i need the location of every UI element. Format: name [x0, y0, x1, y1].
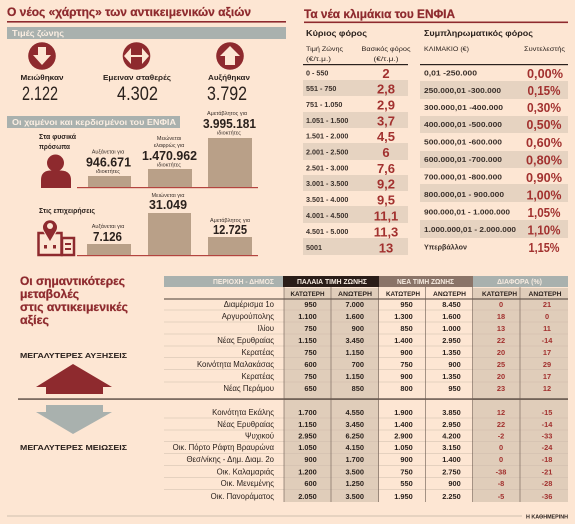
heading bar: losers and winners of ENFIA: [7, 116, 180, 128]
bar chart: individuals: 946.671: [86, 154, 131, 170]
table: main tax: 11,1: [374, 208, 398, 224]
rows: biggest decreases: 1.150: [298, 420, 317, 429]
rows: biggest increases: Νέας Ερυθραίας: [217, 336, 274, 345]
table: main tax: 2.501 - 3.000: [306, 164, 348, 172]
stat: decreased: [20, 73, 64, 105]
rows: biggest increases: -14: [542, 336, 553, 345]
heading bar: zone prices: Τιμές ζώνης: [12, 29, 64, 38]
rows: biggest increases: 21: [543, 300, 551, 309]
table: supplementary tax: 0,30%: [527, 100, 561, 115]
heading: most significant changes: [20, 274, 128, 327]
table: main tax: 13: [379, 240, 393, 256]
table: main tax: 751 - 1.050: [306, 100, 342, 109]
rows: biggest increases: 950: [400, 300, 413, 309]
bar chart: individuals: [77, 110, 258, 188]
rows: biggest decreases: 2.950: [298, 432, 317, 440]
table: supplementary tax: 1,10%: [528, 222, 561, 238]
rows: biggest decreases: -2: [498, 432, 504, 440]
rows: biggest decreases: 3.850: [442, 408, 461, 417]
table: price changes: ΚΑΤΩΤΕΡΗ: [290, 291, 325, 298]
rows: biggest increases: 17: [543, 348, 551, 357]
rows: biggest decreases: 0: [499, 443, 503, 452]
rows: biggest decreases: Κοινότητα Εκάλης: [212, 408, 274, 417]
rows: biggest increases: Διαμέρισμα 1ο: [224, 300, 275, 309]
table: supplementary tax: 500.000,01 -600.000: [424, 138, 502, 146]
heading bar: losers and winners of ENFIA: Οι χαμένοι και κερδισμένοι του ΕΝΦΙΑ: [12, 118, 176, 127]
rows: biggest increases: 1.400: [394, 336, 413, 345]
rows: biggest increases: 11: [543, 324, 551, 333]
table: supplementary tax: 0,01 -250.000: [424, 68, 477, 78]
table: price changes: ΔΙΑΦΟΡΑ (%): [497, 279, 542, 286]
rows: biggest increases: Κερατέας: [242, 372, 274, 381]
rows: biggest decreases: -8: [498, 479, 504, 488]
rows: biggest increases: 1.350: [442, 372, 461, 381]
bar chart: businesses: Αμετάβλητος για: [210, 217, 251, 224]
rows: biggest increases: Κοινότητα Μαλακάσας: [197, 360, 274, 369]
rows: biggest decreases: Οικ. Καλαμαριάς: [217, 468, 274, 476]
heading: most significant changes: Οι σημαντικότερες: [20, 274, 125, 288]
rows: biggest increases: 750: [304, 324, 317, 333]
rows: biggest decreases: 900: [304, 455, 317, 464]
table: main tax: 0 - 550: [306, 68, 328, 78]
icon: stayed stable: [123, 42, 150, 70]
table: supplementary tax: 1,05%: [528, 205, 561, 220]
table: main tax: Κύριος φόρος: [306, 28, 368, 38]
icon: person: [41, 154, 71, 188]
rows: biggest decreases: 4.550: [346, 408, 364, 417]
rows: biggest increases: 20: [497, 372, 505, 381]
rows: biggest decreases: 22: [497, 420, 505, 429]
panel: new ENFIA brackets: [303, 7, 568, 256]
bar chart: individuals: ιδιοκτήτες: [157, 162, 181, 168]
table: main tax: 4.501 - 5.000: [306, 227, 348, 236]
stat: increased: Αυξήθηκαν: [208, 73, 250, 82]
rows: biggest increases: 7.000: [346, 300, 364, 309]
rows: biggest decreases: -38: [496, 468, 506, 476]
table: main tax: 3,7: [377, 114, 395, 128]
table: main tax: 551 - 750: [306, 84, 336, 93]
rows: biggest decreases: 1.700: [298, 408, 317, 417]
table: main tax: 4,5: [377, 129, 395, 144]
bar chart: businesses: 31.049: [149, 197, 187, 212]
rows: biggest increases: 900: [448, 360, 461, 369]
table: supplementary tax: 1,15%: [528, 240, 560, 255]
stat: stayed stable: 4.302: [117, 84, 158, 105]
table: price changes: ΚΑΤΩΤΕΡΗ: [482, 291, 517, 298]
rows: biggest increases: 600: [304, 360, 317, 369]
title: new ENFIA brackets: Τα νέα κλιμάκια του ΕΝΦΙΑ: [304, 7, 455, 21]
rows: biggest increases: 1.100: [298, 312, 317, 321]
text: individuals: [39, 132, 76, 151]
table: main tax: 5001: [306, 243, 322, 252]
icon: buildings with map pin: [38, 220, 74, 255]
table: main tax: 3.501 - 4.000: [306, 195, 348, 204]
table: main tax: 2.001 - 2.500: [306, 148, 348, 156]
rows: biggest decreases: 12: [497, 408, 505, 417]
table: main tax: 2,9: [377, 98, 395, 112]
rows: biggest decreases: 1.250: [346, 479, 364, 488]
heading: most significant changes: μεταβολές: [20, 287, 79, 301]
stat: decreased: 2.122: [22, 84, 58, 105]
rows: biggest increases: 1.350: [442, 348, 461, 357]
table: price changes: ΝΕΑ ΤΙΜΗ ΖΩΝΗΣ: [397, 279, 454, 286]
table: main tax: Τιμή Ζώνης: [306, 45, 343, 53]
label: biggest decreases: ΜΕΓΑΛΥΤΕΡΕΣ ΜΕΙΩΣΕΙΣ: [20, 443, 128, 452]
rows: biggest increases: 29: [543, 360, 551, 369]
rows: biggest decreases: -5: [498, 492, 504, 501]
rows: biggest decreases: Οικ. Πόρτο Ράφτη Βραυρώνα: [173, 443, 274, 452]
rows: biggest increases: 950: [448, 384, 461, 393]
bar chart: individuals: ελαφρώς για: [154, 142, 185, 149]
rows: biggest increases: 22: [497, 336, 505, 345]
rows: biggest increases: 1.600: [442, 312, 461, 321]
rows: biggest decreases: Ψυχικού: [245, 432, 274, 440]
rows: biggest increases: [197, 300, 553, 393]
rows: biggest increases: Νέας Περάμου: [223, 384, 274, 393]
rows: biggest increases: 900: [400, 372, 413, 381]
table: supplementary tax: Συντελεστής: [524, 46, 565, 53]
rows: biggest decreases: 0: [499, 455, 503, 464]
rows: biggest increases: 1.150: [346, 372, 364, 381]
rows: biggest decreases: -14: [542, 420, 553, 429]
text: individuals: Στα φυσικά: [39, 132, 76, 141]
rows: biggest decreases: 900: [448, 479, 461, 488]
rows: biggest decreases: 1.200: [298, 468, 317, 476]
rows: biggest decreases: 2.900: [394, 432, 413, 440]
icon: decreased: [28, 42, 56, 70]
table: price changes: ΠΕΡΙΟΧΗ - ΔΗΜΟΣ: [213, 279, 274, 286]
rows: biggest decreases: -28: [542, 479, 552, 488]
bar chart: businesses: 7.126: [93, 229, 122, 244]
rows: biggest increases: 850: [400, 324, 413, 333]
rows: biggest increases: Κερατέας: [242, 348, 274, 357]
table: main tax: 2: [382, 66, 390, 81]
rows: biggest decreases: -33: [542, 432, 552, 440]
table: supplementary tax: 1.000.000,01 - 2.000.000: [424, 225, 516, 234]
table: price changes: ΑΝΩΤΕΡΗ: [338, 291, 372, 298]
label: biggest increases: ΜΕΓΑΛΥΤΕΡΕΣ ΑΥΞΗΣΕΙΣ: [20, 351, 128, 360]
rows: biggest increases: 650: [304, 384, 317, 393]
table: main tax: (€/τ.μ.): [306, 56, 331, 63]
bar chart: businesses: 12.725: [213, 222, 247, 237]
rows: biggest increases: 750: [400, 360, 413, 369]
rows: biggest decreases: -18: [542, 455, 552, 464]
rows: biggest increases: 17: [543, 372, 551, 381]
rows: biggest increases: 8.450: [442, 300, 461, 309]
rows: biggest decreases: 1.900: [394, 408, 413, 417]
table: supplementary tax: 0,50%: [526, 117, 562, 132]
rows: biggest decreases: 1.400: [394, 420, 413, 429]
rows: biggest decreases: 4.150: [346, 443, 364, 452]
table: supplementary tax: 0,90%: [526, 170, 562, 185]
title: new map of property values: Ο νέος «χάρτης» των αντικειμενικών αξιών: [7, 5, 251, 19]
rows: biggest increases: 1.300: [394, 312, 413, 321]
rows: biggest decreases: 1.400: [442, 455, 461, 464]
text: businesses: Στις επιχειρήσεις: [39, 206, 95, 215]
arrow: up: [36, 364, 112, 394]
table: main tax: 2,8: [377, 82, 395, 96]
rows: biggest decreases: 1.050: [394, 443, 413, 452]
rows: biggest decreases: 3.500: [346, 492, 364, 501]
rows: biggest increases: 0: [545, 312, 549, 321]
rows: biggest increases: 800: [400, 384, 413, 393]
table: supplementary tax: Συμπληρωματικός φόρος: [424, 28, 534, 38]
table: main tax: 7,6: [377, 161, 395, 176]
rows: biggest decreases: 2.750: [442, 468, 461, 476]
rows: biggest increases: 700: [352, 360, 364, 369]
rows: biggest decreases: Οικ. Μενεμένης: [221, 479, 274, 488]
text: individuals: πρόσωπα: [39, 142, 70, 151]
rows: biggest increases: 13: [497, 324, 505, 333]
rows: biggest increases: Ιλίου: [258, 324, 274, 333]
rows: biggest decreases: -36: [542, 492, 552, 501]
rows: biggest decreases: 6.250: [346, 432, 364, 440]
rows: biggest increases: 900: [352, 324, 364, 333]
table: supplementary tax: 700.000,01 -800.000: [424, 172, 502, 182]
panel: most significant changes: [18, 274, 568, 502]
rows: biggest decreases: 2.950: [442, 420, 461, 429]
stat: increased: 3.792: [207, 84, 247, 105]
table: main tax: 1.051 - 1.500: [306, 116, 348, 125]
table: main tax: 3.001 - 3.500: [306, 179, 348, 188]
rows: biggest decreases: 2.050: [298, 492, 317, 501]
rows: biggest increases: 850: [352, 384, 364, 393]
bar chart: businesses: [77, 192, 258, 256]
bar chart: individuals: ιδιοκτήτες: [217, 130, 241, 136]
rows: biggest decreases: 1.700: [346, 455, 364, 464]
rows: biggest decreases: -21: [542, 468, 552, 476]
rows: biggest increases: Αργυρούπολης: [222, 312, 274, 321]
rows: biggest increases: 23: [497, 384, 505, 393]
table: price changes: ΚΑΤΩΤΕΡΗ: [386, 291, 420, 298]
rows: biggest decreases: -24: [542, 443, 553, 452]
heading: most significant changes: στις αντικειμενικές: [20, 300, 128, 314]
rows: biggest decreases: Θεσ/νίκης - Δημ. Διαμ. 2ο: [186, 455, 275, 464]
rows: biggest increases: 20: [497, 348, 505, 357]
table: supplementary tax: 0,15%: [528, 83, 561, 98]
table: main tax: 9,5: [377, 192, 395, 208]
rows: biggest increases: 1.150: [298, 336, 317, 345]
rows: biggest increases: 0: [499, 300, 503, 309]
table: main tax: 9,2: [377, 176, 395, 192]
heading: most significant changes: αξίες: [20, 313, 49, 327]
rows: biggest decreases: Νέας Ερυθραίας: [217, 420, 274, 429]
rows: biggest increases: 750: [304, 372, 317, 381]
rows: biggest increases: 2.950: [442, 336, 461, 345]
table: supplementary tax: Υπερβάλλον: [424, 242, 467, 252]
credit: Kathimerini: Η ΚΑΘΗΜΕΡΙΝΗ: [526, 514, 568, 520]
table: supplementary tax: 900.000,01 - 1.000.000: [424, 208, 510, 216]
rows: biggest decreases: 550: [400, 479, 413, 488]
table: supplementary tax: 0,60%: [526, 135, 562, 150]
table: supplementary tax: 250.000,01 -300.000: [424, 86, 501, 95]
table: supplementary tax: 0,00%: [527, 66, 563, 81]
table: supplementary tax: 400.000,01 -500.000: [424, 120, 502, 129]
rows: biggest decreases: 600: [304, 479, 317, 488]
table: supplementary tax: [420, 28, 568, 255]
table: supplementary tax: 0,80%: [526, 152, 562, 168]
table: main tax: (€/τ.μ.): [374, 56, 398, 63]
table: supplementary tax: 800.000,01 - 900.000: [424, 190, 504, 199]
stat: decreased: Μειώθηκαν: [20, 73, 64, 82]
table: price changes: ΑΝΩΤΕΡΗ: [433, 291, 466, 298]
rows: biggest decreases: -15: [542, 408, 552, 417]
rows: biggest decreases: 900: [400, 455, 413, 464]
rows: biggest increases: 12: [543, 384, 551, 393]
icon: increased: [216, 42, 244, 70]
table: supplementary tax: 600.000,01 -700.000: [424, 155, 502, 164]
stat: increased: [207, 73, 250, 105]
rows: biggest increases: 950: [304, 300, 317, 309]
heading bar: zone prices: [7, 27, 286, 39]
rows: biggest increases: 3.450: [346, 336, 364, 345]
table: supplementary tax: ΚΛΙΜΑΚΙΟ (€): [424, 46, 469, 53]
rows: biggest decreases: 1.950: [394, 492, 413, 501]
rows: biggest increases: 25: [497, 360, 505, 369]
stat: stayed stable: Εμειναν σταθερές: [103, 73, 171, 82]
arrow: down: [36, 405, 112, 434]
bar chart: individuals: ιδιοκτήτες: [96, 168, 120, 175]
bar chart: individuals: Αυξάνεται για: [92, 148, 125, 156]
table: main tax: Βασικός φόρος: [362, 45, 410, 53]
rows: biggest decreases: 2.250: [442, 492, 461, 501]
table: price changes: ΠΑΛΑΙΑ ΤΙΜΗ ΖΩΝΗΣ: [297, 279, 367, 286]
table: supplementary tax: 1,00%: [526, 188, 562, 202]
rows: biggest decreases: 4.200: [442, 432, 461, 440]
table: main tax: [303, 28, 410, 256]
table: supplementary tax: 300.000,01 -400.000: [424, 103, 503, 112]
rows: biggest increases: 900: [400, 348, 413, 357]
rows: biggest decreases: 3.150: [442, 443, 461, 452]
bar chart: businesses: Μειώνεται για: [152, 192, 185, 199]
table: main tax: 4.001 - 4.500: [306, 211, 348, 220]
table: main tax: 1.501 - 2.000: [306, 132, 348, 140]
table: price changes: [18, 276, 568, 502]
rows: biggest decreases: 3.500: [346, 468, 364, 476]
bar chart: individuals: 3.995.181: [203, 116, 256, 131]
rows: biggest decreases: [173, 408, 553, 501]
rows: biggest decreases: 3.450: [346, 420, 364, 429]
rows: biggest increases: 1.000: [442, 324, 461, 333]
rows: biggest decreases: 750: [400, 468, 413, 476]
table: price changes: ΑΝΩΤΕΡΗ: [528, 291, 562, 298]
rows: biggest increases: 1.150: [346, 348, 364, 357]
rows: biggest increases: 18: [497, 312, 505, 321]
panel: property value map: [7, 5, 286, 256]
rows: biggest decreases: Οικ. Πανοράματος: [211, 492, 274, 501]
bar chart: individuals: Αμετάβλητος για: [207, 110, 248, 117]
rows: biggest decreases: 1.050: [298, 443, 317, 452]
rows: biggest increases: 1.600: [346, 312, 364, 321]
table: main tax: 6: [382, 145, 390, 160]
table: main tax: 11,3: [374, 224, 398, 240]
bar chart: businesses: Αυξάνεται για: [92, 223, 125, 230]
bar chart: individuals: Μειώνεται: [157, 135, 182, 142]
rows: biggest increases: 750: [304, 348, 317, 357]
stat: stayed stable: [103, 73, 171, 105]
bar chart: individuals: 1.470.962: [142, 148, 197, 163]
